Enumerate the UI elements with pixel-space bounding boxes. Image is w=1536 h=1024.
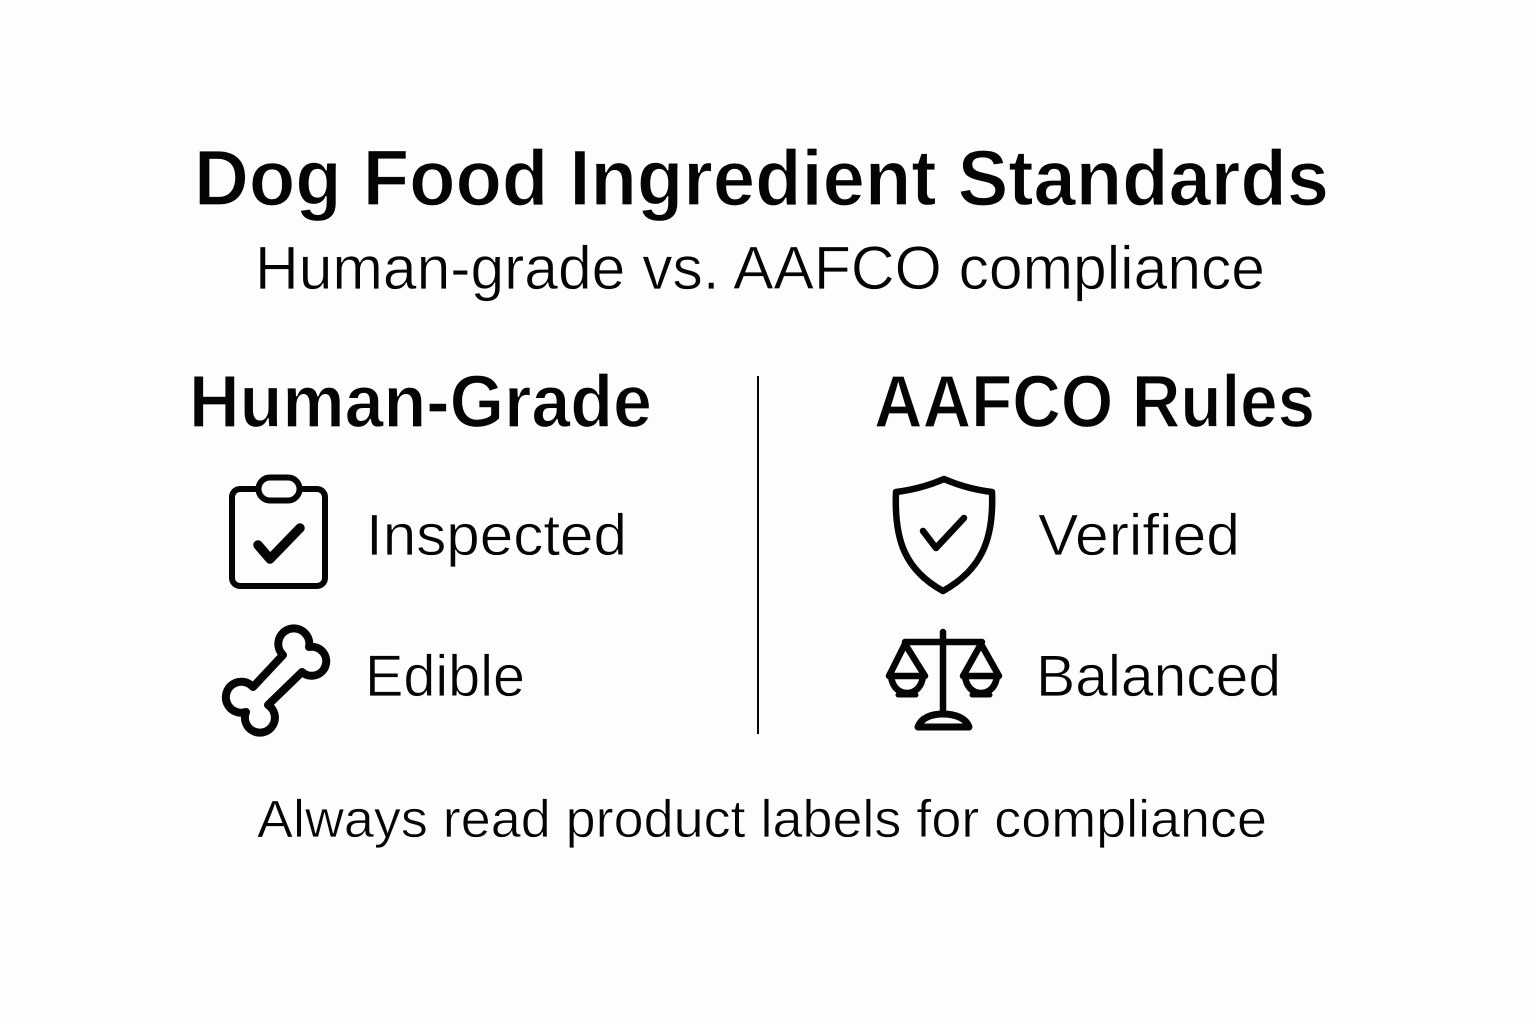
divider [757,376,759,734]
panel: human-grade [189,360,652,733]
label: inspected: Inspected [366,503,627,568]
title: Dog Food Ingredient Standards [194,133,1329,222]
label: verified: Verified [1038,503,1240,568]
footer note: Always read product labels for compliance [257,790,1267,849]
icon: bone [226,628,326,733]
icon: shield with check [896,479,992,591]
label: balanced: Balanced [1036,644,1281,709]
heading: human-grade: Human-Grade [189,360,652,443]
icon: clipboard with check [232,478,325,586]
heading: aafco rules: AAFCO Rules [874,360,1315,443]
panel: aafco rules [874,360,1315,727]
subtitle: Human-grade vs. AAFCO compliance [255,234,1265,302]
label: edible: Edible [365,644,525,709]
icon: balance scales [889,632,999,727]
